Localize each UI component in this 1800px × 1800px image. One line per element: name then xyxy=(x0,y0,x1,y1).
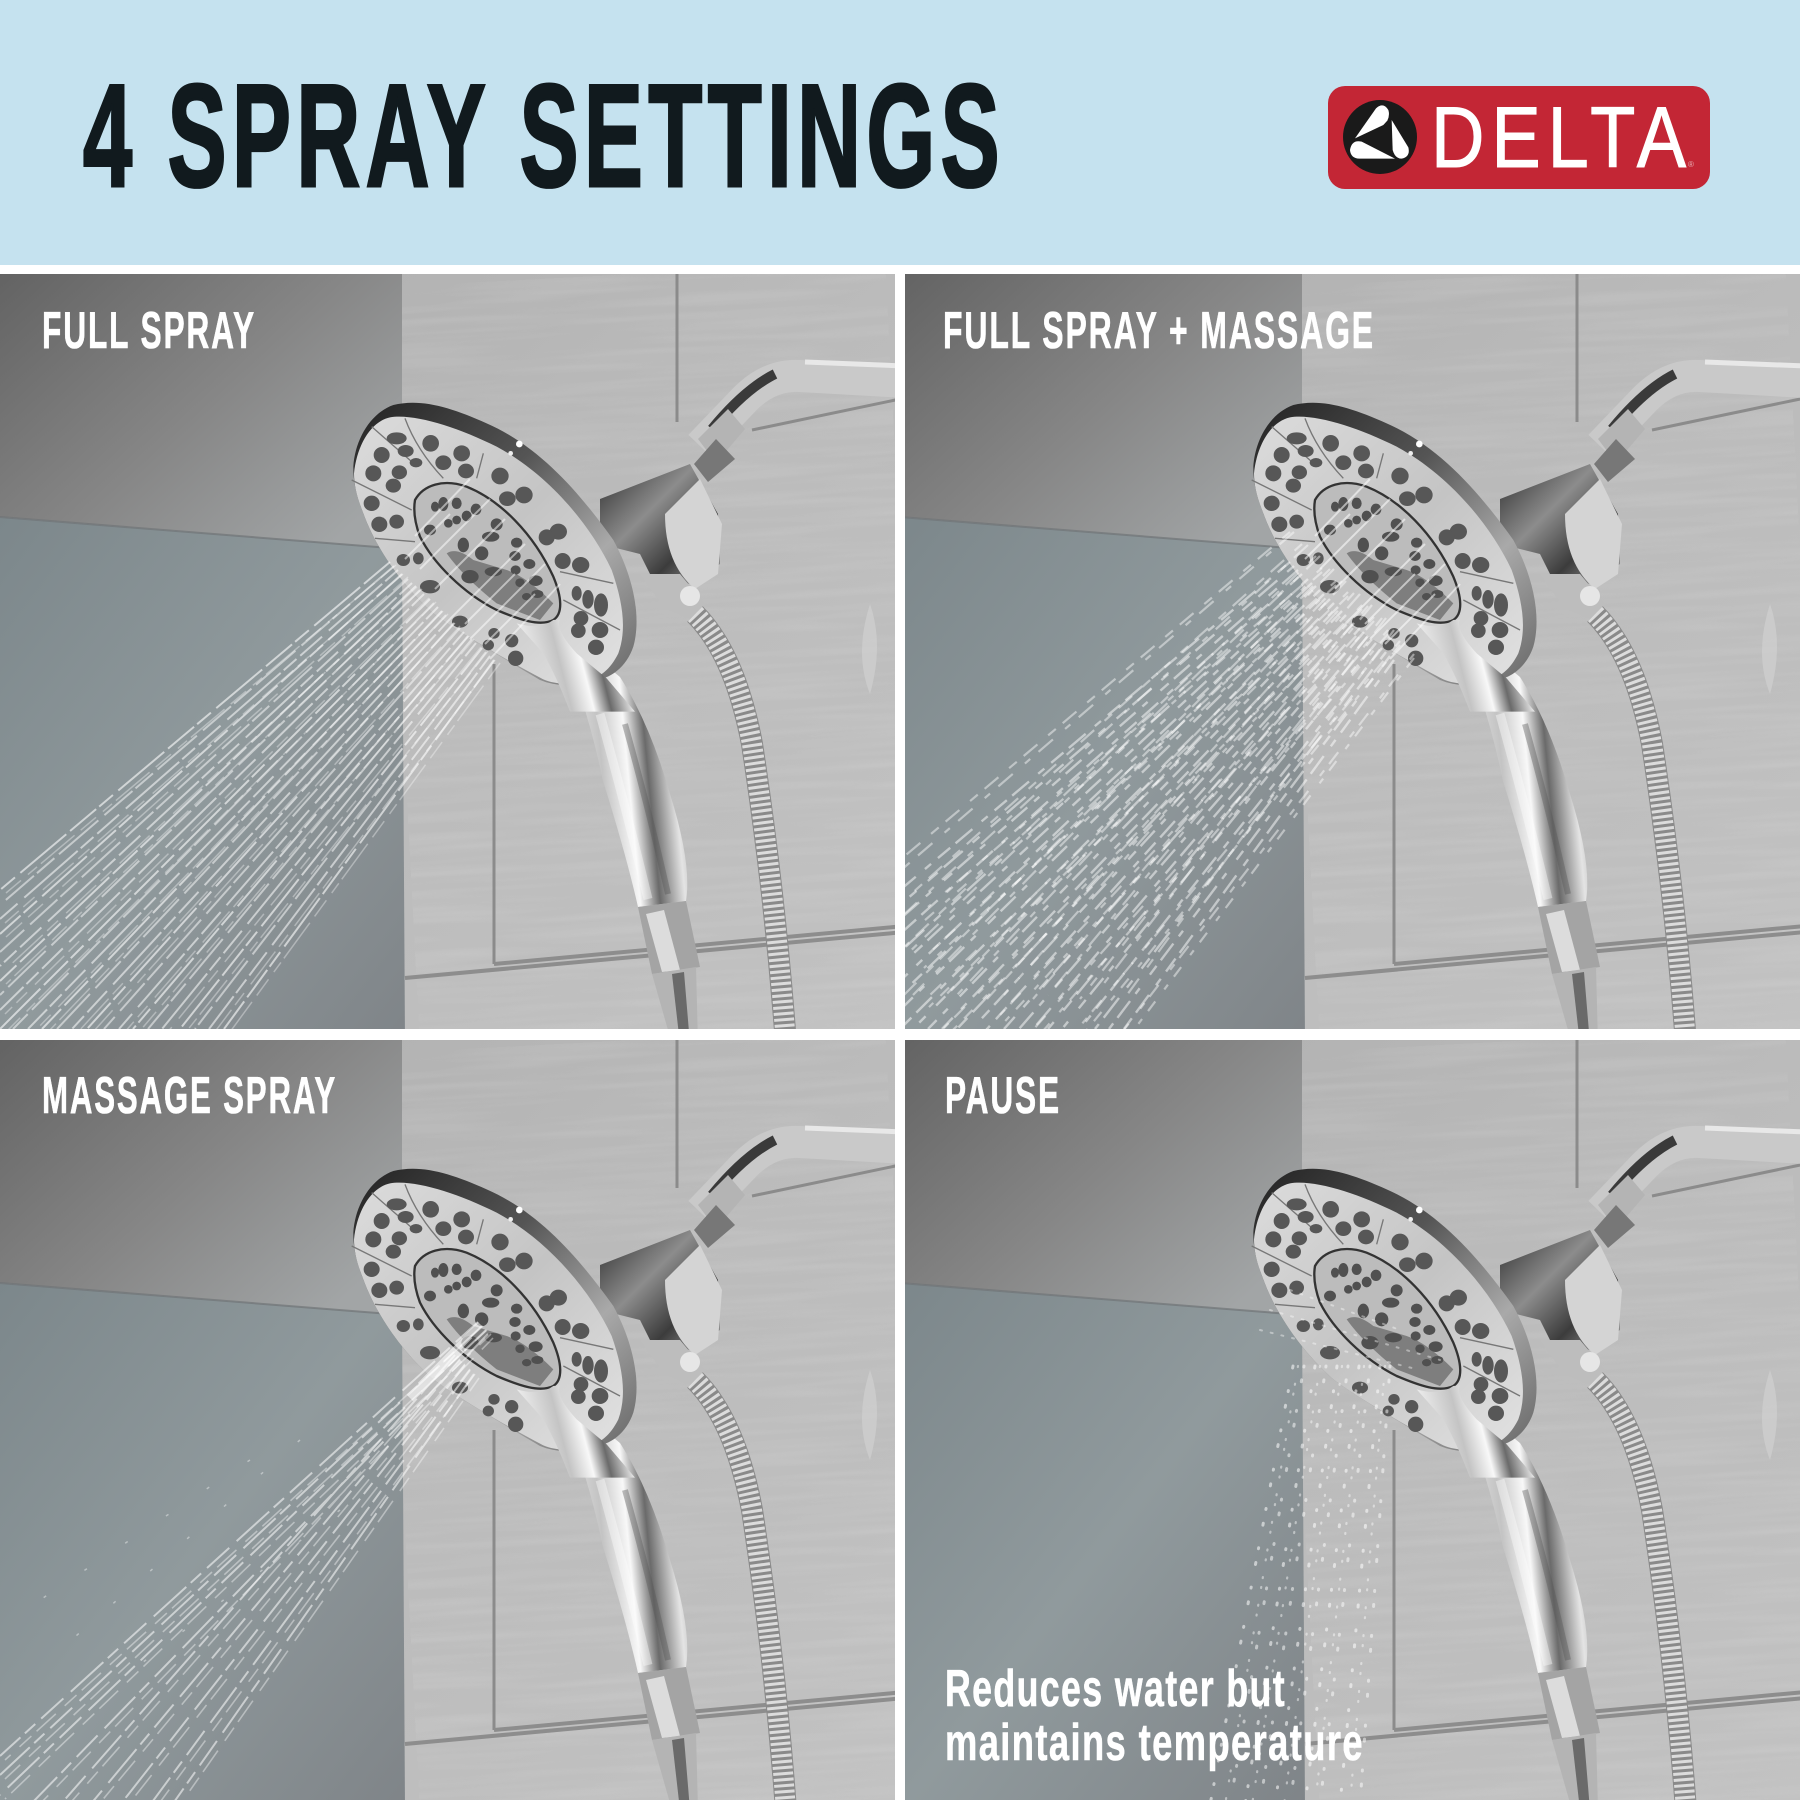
title: 4 SPRAY SETTINGS xyxy=(83,54,1005,217)
text: pause description: maintains temperature xyxy=(945,1714,1364,1772)
panel: pause xyxy=(900,1027,1800,1800)
label: full spray + massage: FULL SPRAY + MASSAGE xyxy=(943,302,1375,360)
panel: full spray + massage xyxy=(900,261,1800,1057)
text: pause description xyxy=(945,1660,1364,1772)
logo: Delta xyxy=(1328,86,1710,189)
label: full spray: FULL SPRAY xyxy=(42,302,256,360)
label: massage spray: MASSAGE SPRAY xyxy=(42,1067,337,1125)
label: pause: PAUSE xyxy=(945,1067,1061,1125)
logo: Delta: ® xyxy=(1688,160,1694,169)
logo: Delta: DELTA xyxy=(1431,90,1693,186)
panel: full spray xyxy=(0,261,925,1057)
panel: massage spray xyxy=(0,1027,925,1800)
header band xyxy=(0,0,1800,265)
text: pause description: Reduces water but xyxy=(945,1660,1286,1718)
